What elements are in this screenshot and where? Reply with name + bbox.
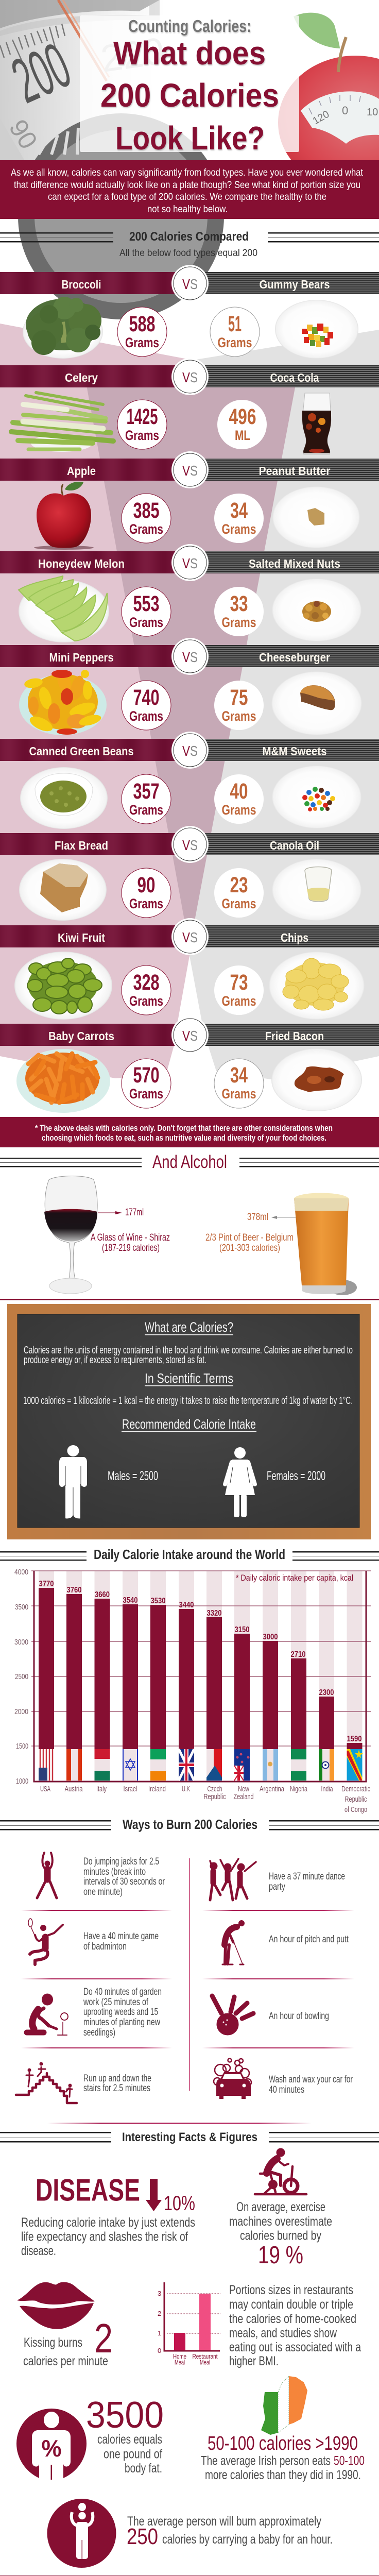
badge: 357 grams: 357	[133, 779, 160, 804]
badge: 90 grams: Grams	[129, 896, 163, 911]
references panel	[0, 2575, 379, 2576]
fact: kissing: calories per minute	[23, 2354, 108, 2368]
badge: 40 grams: Grams	[221, 802, 256, 818]
text: garden work: seedlings)	[83, 2027, 115, 2038]
x-axis labels: Republic	[204, 1792, 226, 1801]
header: Celery vs Coca Cola: Coca Cola	[270, 371, 319, 384]
badge: 34 grams: 34	[230, 498, 248, 523]
y-axis labels: 3000	[14, 1638, 28, 1647]
image: apple with scale: 0	[342, 104, 348, 117]
badge: 75 grams: Grams	[221, 708, 256, 724]
x-axis labels: New	[238, 1785, 249, 1793]
badge: 570 grams: 570	[133, 1063, 160, 1088]
icon: dancers	[210, 1859, 256, 1900]
food: mini peppers	[19, 670, 107, 735]
image: bathroom scale dial: 200	[2, 29, 80, 117]
text: badminton	[83, 1931, 159, 1952]
label: beer	[205, 1232, 294, 1253]
fact: 3500 calories: one pound of	[104, 2447, 162, 2462]
flag: Israel	[123, 1749, 138, 1781]
text: dance party: Have a 37 minute dance	[269, 1871, 345, 1882]
badge: 73 grams: 73	[230, 970, 248, 995]
badge: 496 ml	[217, 400, 267, 449]
heading: Ways to Burn 200 Calories: Ways to Burn 200 Calories	[123, 1817, 257, 1832]
badge: 328 grams: 328	[133, 970, 160, 995]
badge: 75 grams	[214, 681, 264, 730]
header: Kiwi Fruit vs Chips: Kiwi Fruit	[58, 931, 105, 944]
text: garden work: Do 40 minutes of garden	[83, 1987, 162, 1997]
badge: 75 grams: 75	[230, 685, 248, 710]
icon: person carrying baby	[47, 2499, 116, 2568]
text: portions	[229, 2283, 361, 2368]
text: stairs: Run up and down the	[83, 2073, 151, 2084]
text: garden work: work (25 minutes of	[83, 1997, 149, 2008]
x-axis labels: Zealand	[234, 1792, 253, 1801]
header: Honeydew Melon vs Salted Mixed Nuts: Salted Mixed Nuts	[249, 557, 340, 570]
text: stairs	[83, 2073, 151, 2094]
badge: 34 grams bacon: 34	[230, 1063, 248, 1088]
chalk text: definition: produce energy or, if excess to requirements, stored as fat.	[24, 1354, 206, 1366]
label: males: Males = 2500	[108, 1469, 158, 1483]
title: Look Like?	[115, 120, 265, 157]
food: salted mixed nuts	[272, 579, 361, 641]
x-axis labels: Nigeria	[290, 1785, 307, 1793]
badge: 33 grams: Grams	[221, 615, 256, 630]
header: Kiwi Fruit vs Chips: VS	[182, 929, 198, 945]
fact: Irish diet: The average Irish person eats	[201, 2453, 331, 2468]
header: Apple vs Peanut Butter: Peanut Butter	[259, 464, 331, 478]
badge: 40 grams: 40	[230, 779, 248, 804]
mini bar chart: home vs restaurant meal	[158, 2282, 220, 2366]
icon: gardening	[27, 1994, 68, 2035]
x-axis labels: Ireland	[148, 1785, 166, 1793]
title: 200 Calories	[100, 77, 279, 114]
image: bathroom scale dial: 220	[98, 29, 167, 80]
food: baby carrots	[16, 1049, 110, 1113]
icon: male figure	[59, 1445, 87, 1518]
image: apple with scale	[0, 13, 379, 191]
y-axis labels: 3500	[15, 1603, 28, 1612]
value labels: 3440	[179, 1601, 194, 1609]
row headers	[0, 265, 379, 1054]
value labels: 3660	[95, 1590, 110, 1599]
food: peanut butter	[272, 486, 360, 548]
label: beer: 2/3 Pint of Beer - Belgium	[205, 1232, 294, 1243]
y-axis labels: 1500	[16, 1742, 28, 1751]
header: Canned Green Beans vs M&M Sweets	[0, 732, 379, 769]
header: Apple vs Peanut Butter: Apple	[67, 464, 96, 478]
text: car wash: 40 minutes	[269, 2084, 304, 2095]
value labels: 3000	[263, 1633, 278, 1641]
food: apple	[34, 482, 94, 550]
badge: 357 grams: Grams	[129, 802, 163, 818]
text: stairs: stairs for 2.5 minutes	[83, 2083, 150, 2094]
food: fried bacon	[271, 1048, 362, 1111]
food: chips	[269, 952, 365, 1020]
icon: jumping jacks	[37, 1853, 57, 1898]
badge: 553 grams: 553	[133, 591, 160, 616]
image: bathroom scale dial: 90	[4, 114, 43, 154]
badge: 34 grams bacon	[214, 1059, 264, 1108]
badge: 51 grams: Grams	[217, 335, 252, 350]
image: apple with scale: 120	[311, 109, 331, 127]
mini bar chart: home vs restaurant meal: Meal	[200, 2359, 210, 2366]
x-axis labels: of Congo	[344, 1805, 367, 1814]
value labels	[39, 1580, 362, 1743]
icon: badminton	[28, 1919, 63, 1964]
food: cheeseburger	[271, 671, 362, 735]
arrow: 177ml: 177ml	[125, 1207, 144, 1218]
badge: 1425 grams	[117, 400, 167, 449]
image: bathroom scale dial	[0, 0, 224, 319]
x-axis labels: Republic	[345, 1795, 367, 1804]
icon: stairs	[16, 2062, 77, 2103]
header: Honeydew Melon vs Salted Mixed Nuts	[0, 544, 379, 581]
x-axis labels	[40, 1785, 370, 1814]
fact: exercise machines: calories burned by	[240, 2229, 321, 2243]
mini bar chart: home vs restaurant meal: Restaurant	[193, 2352, 218, 2360]
arrow: 378ml: 378ml	[247, 1212, 268, 1223]
chalk text: definition	[24, 1345, 353, 1366]
value labels: 3770	[39, 1580, 54, 1588]
icon: car wash	[214, 2059, 251, 2099]
food: broccoli	[23, 297, 103, 359]
flag: Ireland	[150, 1749, 166, 1781]
header: Apple vs Peanut Butter: VS	[182, 463, 198, 479]
text: portions: meals, and studies show	[229, 2326, 337, 2340]
header: Baby Carrots vs Fried Bacon: Fried Bacon	[265, 1029, 324, 1043]
fact: disease: 10%	[164, 2192, 195, 2215]
badge: 385 grams: Grams	[129, 521, 163, 537]
food: honeydew melon	[19, 576, 109, 642]
badge: 496 ml: ML	[235, 428, 250, 443]
food: celery	[11, 393, 113, 452]
text: jumping jacks: one minute)	[83, 1887, 123, 1897]
badge: 328 grams	[122, 965, 171, 1015]
food: m&m sweets	[272, 766, 361, 828]
label: wine: (187-219 calories)	[102, 1243, 160, 1253]
icon: female figure	[225, 1447, 255, 1517]
badge: 588 grams: 588	[129, 312, 156, 336]
fact: carrying a baby	[47, 2499, 333, 2568]
y-axis labels: 1000	[16, 1777, 28, 1786]
fact: 3500 calories: calories equals	[97, 2432, 162, 2447]
chalkboard panel	[7, 1304, 371, 1539]
header: Baby Carrots vs Fried Bacon	[0, 1016, 379, 1054]
header: Flax Bread vs Canola Oil: Flax Bread	[55, 839, 108, 852]
badge: 23 grams: Grams	[221, 896, 256, 911]
badge: 496 ml: 496	[229, 404, 256, 429]
header: Flax Bread vs Canola Oil: VS	[182, 837, 198, 853]
badge: 90 grams	[122, 868, 171, 918]
chalk heading: In Scientific Terms: In Scientific Terms	[145, 1370, 233, 1386]
y-axis labels: 4000	[14, 1568, 28, 1577]
icon: exercise bike	[255, 2148, 306, 2194]
badge: 73 grams	[214, 965, 264, 1015]
wine glass illustration	[44, 1176, 97, 1294]
food: kiwi fruit	[14, 952, 112, 1020]
text: bowling: An hour of bowling	[269, 2011, 329, 2022]
translucent title panel	[80, 15, 299, 152]
header: Flax Bread vs Canola Oil: Canola Oil	[270, 839, 319, 852]
food: canola oil	[272, 859, 361, 921]
header: Canned Green Beans vs M&M Sweets: Canned Green Beans	[29, 744, 134, 758]
fact: exercise machines: On average, exercise	[236, 2200, 325, 2214]
fact: exercise machines: machines overestimate	[229, 2214, 332, 2229]
header: Baby Carrots vs Fried Bacon: VS	[182, 1028, 198, 1044]
mini bar chart: home vs restaurant meal: 3	[158, 2290, 161, 2297]
flag: India	[319, 1749, 334, 1781]
badge: 570 grams	[122, 1059, 171, 1108]
x-axis labels: Italy	[96, 1785, 107, 1793]
fact: disease: life expectancy and slashes the risk of	[21, 2230, 188, 2244]
header: Baby Carrots vs Fried Bacon: Baby Carrots	[48, 1029, 114, 1043]
value labels: 1590	[347, 1735, 362, 1743]
header: Broccoli vs Gummy Bears	[0, 265, 379, 302]
badge: 33 grams	[214, 587, 264, 636]
header: Canned Green Beans vs M&M Sweets: M&M Sweets	[263, 744, 326, 758]
y-axis labels	[14, 1568, 28, 1786]
badge: 357 grams	[122, 774, 171, 824]
text: garden work: uprooting weeds and 15	[83, 2007, 158, 2018]
flag: Nigeria	[291, 1749, 306, 1781]
fact: Irish diet: 50-100	[334, 2453, 365, 2468]
arrow: 177ml	[98, 1207, 144, 1218]
header: Canned Green Beans vs M&M Sweets: VS	[182, 743, 198, 759]
fact: disease: disease.	[21, 2244, 56, 2258]
icon: person with percent	[16, 2409, 87, 2480]
badge: 34 grams: Grams	[221, 521, 256, 537]
header: Broccoli vs Gummy Bears: Broccoli	[62, 278, 101, 291]
fact: disease: Reducing calorie intake by just extends	[21, 2215, 195, 2230]
header: Mini Peppers vs Cheeseburger: Cheeseburger	[259, 651, 330, 664]
flag: Argentina	[263, 1749, 278, 1781]
icon: person with percent: %	[41, 2435, 62, 2462]
value labels: 3540	[123, 1596, 138, 1605]
intro band: not so healthy below.	[147, 204, 228, 215]
food: canned green beans	[20, 767, 108, 829]
badge: 570 grams: Grams	[129, 1086, 163, 1101]
badge: 33 grams: 33	[230, 591, 248, 616]
mini bar chart: home vs restaurant meal: Meal	[175, 2359, 185, 2366]
badge: 51 grams	[210, 307, 260, 357]
chalk heading: Recommended Calorie Intake: Recommended Calorie Intake	[122, 1416, 256, 1432]
badge: 34 grams	[214, 494, 264, 543]
value labels: 3760	[67, 1586, 82, 1595]
header: Honeydew Melon vs Salted Mixed Nuts: Honeydew Melon	[38, 557, 125, 570]
header: Flax Bread vs Canola Oil	[0, 826, 379, 863]
badge: 34 grams bacon: Grams	[221, 1086, 256, 1101]
fact: carrying a baby: calories by carrying a baby for an hour.	[162, 2532, 333, 2547]
hero banner	[0, 0, 379, 319]
comparison background	[0, 324, 379, 1079]
x-axis labels: Czech	[207, 1785, 222, 1793]
header: Celery vs Coca Cola: VS	[182, 369, 198, 385]
text: pitch and putt: An hour of pitch and putt	[269, 1934, 349, 1945]
footnote band	[0, 1117, 379, 1147]
value labels: 3150	[235, 1625, 250, 1634]
food: coca cola glass	[302, 393, 331, 454]
badge: 73 grams: Grams	[221, 993, 256, 1009]
badge: 553 grams	[122, 587, 171, 636]
fact: 3500 calories: 3500	[86, 2395, 164, 2436]
badge: 40 grams	[214, 774, 264, 824]
header: Kiwi Fruit vs Chips	[0, 918, 379, 955]
y-axis labels: 2000	[14, 1707, 28, 1716]
text: car wash	[269, 2074, 353, 2095]
x-axis labels: Austria	[65, 1785, 83, 1793]
fact: exercise machines: 19 %	[258, 2242, 303, 2269]
header: Broccoli vs Gummy Bears: VS	[182, 276, 198, 292]
fact: disease: DISEASE	[36, 2173, 140, 2207]
header: Broccoli vs Gummy Bears: Gummy Bears	[260, 278, 330, 291]
label: females: Females = 2000	[267, 1469, 325, 1483]
text: portions: higher BMI.	[229, 2354, 279, 2368]
intro band: can expect for a food type of 200 calories. We compare the healthy to the	[48, 191, 326, 202]
fact: kissing: Kissing burns	[24, 2335, 82, 2350]
subheading: All the below food types equal 200	[119, 248, 257, 259]
flag: DR Congo	[347, 1749, 363, 1781]
beer glass illustration	[294, 1193, 357, 1295]
heading: Interesting Facts & Figures: Interesting Facts & Figures	[122, 2130, 257, 2144]
badge: 385 grams	[122, 494, 171, 543]
bars	[39, 1588, 363, 1749]
text: badminton: of badminton	[83, 1941, 127, 1952]
header: Mini Peppers vs Cheeseburger: VS	[182, 649, 198, 665]
text: jumping jacks: minutes (break into	[83, 1867, 146, 1877]
badge: 588 grams	[117, 307, 167, 357]
value labels: 2300	[319, 1688, 334, 1697]
value labels: 3530	[150, 1597, 166, 1605]
badge: 328 grams: Grams	[129, 993, 163, 1009]
y-axis labels: 2500	[15, 1672, 28, 1681]
header: Mini Peppers vs Cheeseburger: Mini Peppers	[49, 651, 113, 664]
icon: map of Ireland	[261, 2376, 307, 2435]
chart column backgrounds	[39, 1571, 363, 1781]
mini bar chart: home vs restaurant meal: Home	[173, 2352, 186, 2360]
header: Mini Peppers vs Cheeseburger	[0, 638, 379, 675]
badge: 23 grams: 23	[230, 873, 248, 897]
header: Apple vs Peanut Butter	[0, 451, 379, 488]
badge: 1425 grams: Grams	[125, 428, 159, 443]
fact: carrying a baby: 250	[127, 2524, 158, 2549]
chart note: * Daily caloric intake per capita, kcal	[236, 1573, 353, 1583]
x-axis labels: U.K	[182, 1785, 190, 1793]
x-axis labels: USA	[40, 1785, 50, 1793]
heading: Daily Calorie Intake around the World: Daily Calorie Intake around the World	[94, 1547, 285, 1562]
image: apple with scale: 10	[367, 107, 378, 118]
mini bar chart: home vs restaurant meal: 1	[158, 2329, 161, 2337]
icon: bowling	[212, 1996, 253, 2035]
x-axis labels: Israel	[124, 1785, 137, 1793]
flag: USA	[39, 1749, 54, 1781]
badge: 385 grams: 385	[133, 498, 160, 523]
fact: kissing: 2	[94, 2315, 113, 2361]
intro band	[0, 160, 379, 219]
text: badminton: Have a 40 minute game	[83, 1931, 159, 1942]
header: Kiwi Fruit vs Chips: Chips	[281, 931, 308, 944]
title	[100, 16, 279, 157]
heading: And Alcohol: And Alcohol	[152, 1152, 227, 1172]
flag: New Zealand	[234, 1749, 250, 1781]
text: dance party	[269, 1871, 345, 1892]
chalk heading: What are Calories?: What are Calories?	[145, 1319, 233, 1335]
flag: UK	[179, 1749, 194, 1781]
badge: 740 grams	[122, 681, 171, 730]
badge: 553 grams: Grams	[129, 615, 163, 630]
icon: golfer	[222, 1921, 244, 1964]
fact: exercise machines	[229, 2148, 332, 2269]
title: What does	[113, 35, 266, 72]
badge: 90 grams: 90	[137, 873, 156, 897]
header: Celery vs Coca Cola: Celery	[65, 371, 98, 384]
badge: 51 grams: 51	[228, 312, 242, 336]
text: dance party: party	[269, 1882, 285, 1892]
food: gummy bears	[275, 300, 358, 359]
label: beer: (201-303 calories)	[219, 1243, 280, 1253]
arrow: down	[146, 2179, 162, 2211]
mini bar chart: home vs restaurant meal: 0	[158, 2347, 161, 2354]
badge: 23 grams	[214, 868, 264, 918]
x-axis labels: Argentina	[260, 1785, 284, 1793]
value labels: 3320	[207, 1609, 222, 1618]
mini bar chart: home vs restaurant meal: 2	[158, 2310, 161, 2317]
badge: 740 grams: Grams	[129, 708, 163, 724]
flag: Austria	[66, 1749, 82, 1781]
amount badges	[117, 307, 267, 1108]
value labels: 2710	[290, 1650, 306, 1659]
flag: Italy	[95, 1749, 110, 1781]
badge: 1425 grams: 1425	[127, 404, 158, 429]
header: Celery vs Coca Cola	[0, 358, 379, 395]
chart axes	[34, 1571, 366, 1782]
text: jumping jacks: intervals of 30 seconds or	[83, 1876, 165, 1887]
badge: 740 grams: 740	[133, 685, 160, 710]
label: wine	[91, 1232, 170, 1253]
fact: Irish diet	[201, 2376, 365, 2482]
icon: lips	[17, 2282, 95, 2329]
badge: 588 grams: Grams	[125, 335, 159, 350]
heading: 200 Calories Compared: 200 Calories Compared	[129, 230, 249, 244]
x-axis labels: India	[321, 1785, 333, 1793]
header: Honeydew Melon vs Salted Mixed Nuts: VS	[182, 555, 198, 571]
bar chart: daily calorie intake	[14, 1568, 371, 1814]
fact: kissing	[17, 2282, 113, 2368]
fact: disease	[21, 2173, 195, 2258]
fact: carrying a baby: The average person will burn approximately	[127, 2514, 321, 2529]
fact: 3500 calories: body fat.	[125, 2461, 162, 2476]
label: wine: A Glass of Wine - Shiraz	[91, 1232, 170, 1243]
text: jumping jacks	[83, 1856, 165, 1897]
arrow: 378ml	[247, 1212, 296, 1223]
fact: 3500 calories	[16, 2395, 164, 2480]
text: garden work: minutes of planting new	[83, 2017, 160, 2028]
flag: Czech Republic	[206, 1749, 222, 1781]
text: jumping jacks: Do jumping jacks for 2.5	[83, 1856, 159, 1867]
text: garden work	[83, 1987, 162, 2038]
food: flax bread	[19, 859, 107, 921]
title: Counting Calories:	[128, 16, 251, 36]
